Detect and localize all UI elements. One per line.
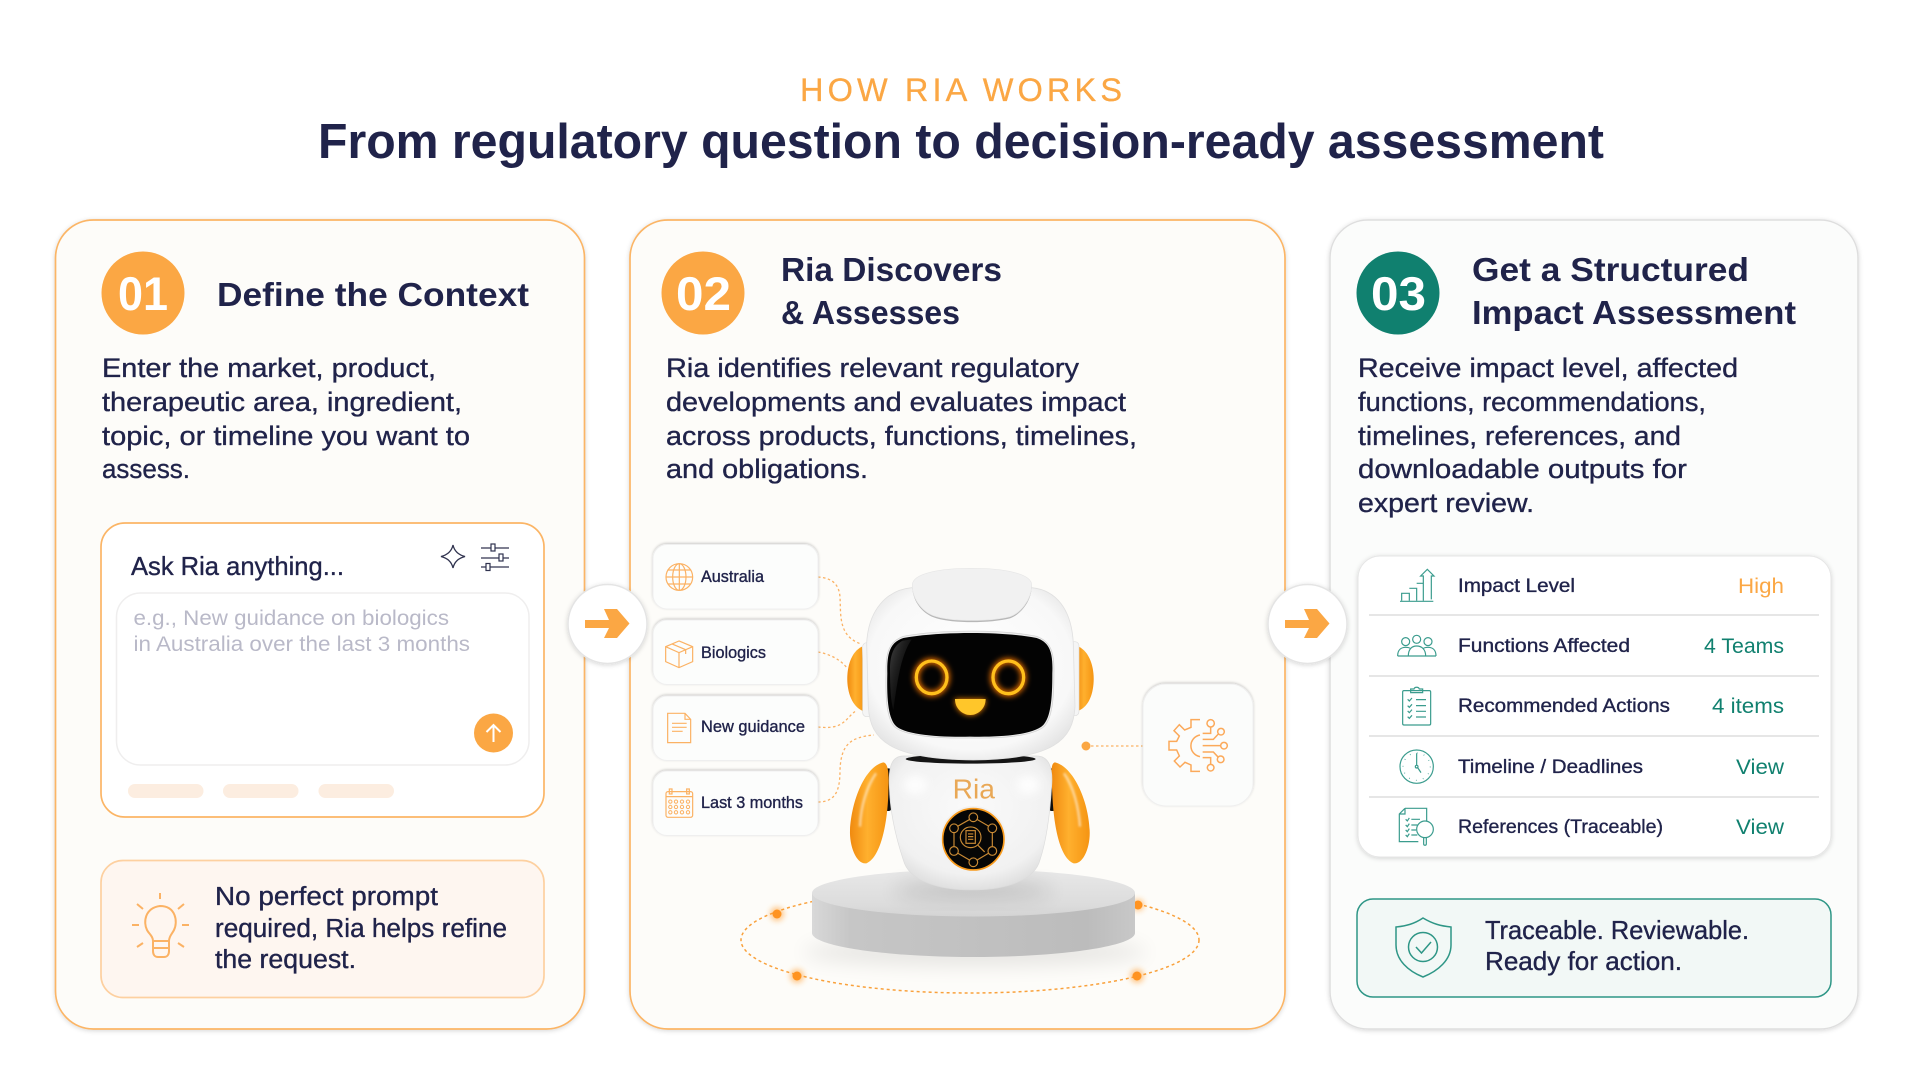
badge 01 <box>102 252 184 334</box>
callout text: Ready for action. <box>1485 946 1682 976</box>
description text: topic, or timeline you want to <box>102 421 470 451</box>
callout text: the request. <box>215 946 356 974</box>
callout: traceable reviewable <box>1357 899 1831 997</box>
row: references traceable <box>1399 808 1784 845</box>
placeholder text: e.g., New guidance on biologics <box>134 606 449 630</box>
output node dot <box>1082 742 1090 750</box>
icon: globe <box>666 564 693 590</box>
callout text: required, Ria helps refine <box>215 915 507 943</box>
description text: downloadable outputs for <box>1358 454 1687 484</box>
chip: australia <box>653 544 818 609</box>
badge 02 <box>662 252 744 334</box>
title: From regulatory question to decision-ready assessment <box>318 115 1604 169</box>
robot body highlights <box>903 776 1040 794</box>
heading: ria discovers and assesses: Ria Discovers <box>781 251 1002 288</box>
heading: ria discovers and assesses <box>781 251 1002 331</box>
input field <box>116 593 529 765</box>
send button <box>474 714 513 752</box>
placeholder text: in Australia over the last 3 months <box>134 632 470 656</box>
chip: biologics <box>653 620 818 684</box>
description text: and obligations. <box>666 454 868 484</box>
row: recommended actions <box>1403 687 1784 725</box>
orbit nodes <box>770 899 1144 983</box>
arrow: step 1 to step 2 <box>568 584 647 664</box>
callout text <box>1485 915 1749 976</box>
row: recommended actions: Recommended Actions <box>1458 696 1670 717</box>
row: impact level: High <box>1738 574 1784 598</box>
description text: therapeutic area, ingredient, <box>102 387 462 417</box>
robot head cap <box>912 568 1032 622</box>
ask ria input card <box>101 523 544 817</box>
arrow: step 2 to step 3 <box>1268 584 1347 664</box>
panel: step 2 ria discovers and assesses <box>630 220 1285 1029</box>
platform <box>803 870 1147 966</box>
description text <box>102 353 470 484</box>
suggestion pills <box>128 784 394 798</box>
description text: developments and evaluates impact <box>666 387 1127 417</box>
icon: rising bars <box>1400 569 1434 601</box>
robot illustration <box>847 568 1094 890</box>
row: timeline deadlines <box>1400 750 1784 783</box>
panel 1 background <box>56 220 584 1029</box>
chip: new guidance <box>653 696 818 760</box>
robot ears <box>847 642 1094 717</box>
icon: clipboard <box>1403 687 1431 725</box>
description text: functions, recommendations, <box>1358 387 1706 417</box>
assessment summary table <box>1358 556 1831 857</box>
description text <box>1358 353 1738 518</box>
orbit ring <box>741 887 1199 993</box>
robot screen <box>886 631 1054 738</box>
icon: sparkle <box>441 545 465 568</box>
icon: document with magnifier <box>1399 808 1433 845</box>
row: functions affected: Functions Affected <box>1458 636 1630 657</box>
row: references traceable: References (Traceable) <box>1458 817 1663 838</box>
chip label: Last 3 months <box>701 793 803 812</box>
robot neck <box>906 754 1036 764</box>
panel: step 1 define the context <box>56 220 584 1029</box>
icon: calendar <box>666 789 693 817</box>
description text: Ria identifies relevant regulatory <box>666 353 1080 383</box>
heading: define the context: Define the Context <box>217 276 529 313</box>
badge 03 <box>1356 252 1440 334</box>
heading: ria discovers and assesses: & Assesses <box>781 294 960 331</box>
robot name: Ria <box>953 773 996 804</box>
robot head <box>867 588 1075 760</box>
row: functions affected: 4 Teams <box>1704 634 1784 658</box>
robot arms <box>850 762 1090 863</box>
heading: get a structured impact assessment: Get a Structured <box>1472 251 1749 288</box>
icon: light bulb <box>132 893 189 957</box>
description text: Enter the market, product, <box>102 353 436 383</box>
chip label: Australia <box>701 567 765 586</box>
robot face <box>916 661 1024 715</box>
description text: across products, functions, timelines, <box>666 421 1137 451</box>
callout text: Traceable. Reviewable. <box>1485 915 1749 945</box>
chip: last 3 months <box>653 771 818 836</box>
placeholder text <box>134 606 470 656</box>
chip label: New guidance <box>701 717 805 736</box>
callout text <box>215 883 507 974</box>
ai gear card <box>1143 684 1253 806</box>
chip label: Biologics <box>701 643 766 662</box>
input connectors <box>818 577 1143 802</box>
panel 2 background <box>630 220 1285 1029</box>
row: impact level: Impact Level <box>1458 576 1575 597</box>
row: recommended actions: 4 items <box>1712 694 1784 718</box>
robot chest badge <box>940 806 1007 873</box>
icon: document <box>668 713 691 743</box>
row: timeline deadlines: View <box>1736 755 1784 779</box>
robot arm joints <box>885 768 1056 811</box>
panel 3 background <box>1330 220 1858 1029</box>
description text: expert review. <box>1358 488 1534 518</box>
description text <box>666 353 1137 484</box>
description text: assess. <box>102 454 190 484</box>
badge 02: 02 <box>676 267 731 320</box>
icon: ai gear circuit <box>1169 720 1227 771</box>
row: references traceable: View <box>1736 815 1784 839</box>
row: impact level <box>1400 569 1784 601</box>
callout: no perfect prompt <box>101 860 544 998</box>
panel: step 3 structured impact assessment <box>1330 220 1858 1029</box>
eyebrow: HOW RIA WORKS: HOW RIA WORKS <box>800 72 1122 108</box>
row: timeline deadlines: Timeline / Deadlines <box>1458 757 1643 778</box>
icon: shield check <box>1396 918 1451 977</box>
callout text: No perfect prompt <box>215 883 438 911</box>
ask ria prompt label: Ask Ria anything... <box>131 551 344 581</box>
row: functions affected <box>1398 634 1784 658</box>
description text: timelines, references, and <box>1358 421 1681 451</box>
heading: get a structured impact assessment: Impact Assessment <box>1472 294 1796 331</box>
badge 03: 03 <box>1371 267 1426 320</box>
icon: clock <box>1400 750 1433 783</box>
robot body <box>889 756 1052 890</box>
icon: people <box>1398 635 1436 656</box>
badge 01: 01 <box>118 267 168 320</box>
description text: Receive impact level, affected <box>1358 353 1738 383</box>
heading: get a structured impact assessment <box>1472 251 1796 331</box>
icon: box <box>666 641 693 668</box>
icon: sliders <box>481 544 509 570</box>
